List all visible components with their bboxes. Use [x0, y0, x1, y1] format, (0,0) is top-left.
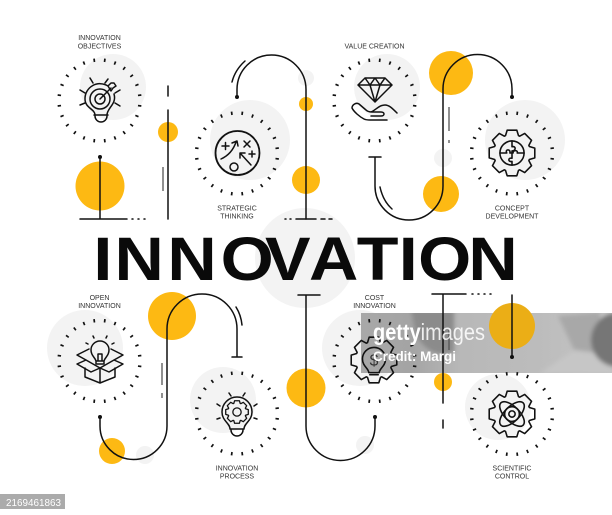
icon: gear with dollar bulb: $ — [370, 352, 379, 369]
title: INNOVATION — [93, 224, 518, 293]
connector: cost innovation curve — [298, 295, 377, 460]
item: cost innovation — [334, 295, 415, 402]
icon: diamond in hand — [352, 78, 397, 120]
connector: objectives stem — [80, 86, 168, 219]
label: THINKING — [220, 214, 254, 221]
item: open innovation — [59, 295, 140, 402]
label: INNOVATION — [78, 35, 121, 42]
connector: open innovation curve — [98, 294, 242, 459]
connector: strategic thinking curve — [232, 55, 332, 219]
yellow circles — [76, 51, 535, 464]
icon: puzzle gear — [489, 130, 535, 176]
item: value creation — [334, 44, 415, 141]
icon: bulb with gear — [217, 393, 257, 436]
label: CONTROL — [495, 474, 529, 481]
connector: scientific control lines — [432, 294, 514, 428]
icon: box with bulb — [77, 336, 123, 383]
label: INNOVATION — [353, 303, 396, 310]
label: OPEN — [90, 295, 109, 302]
icon: target bulb — [80, 78, 120, 122]
label: COST — [365, 295, 385, 302]
connector: value creation curve — [369, 55, 514, 220]
item: innovation process — [196, 373, 278, 481]
label: STRATEGIC — [217, 205, 257, 212]
item: scientific control — [472, 374, 552, 481]
label: DEVELOPMENT — [486, 214, 539, 221]
watermark text — [373, 319, 485, 364]
item: strategic thinking — [196, 113, 278, 221]
label: PROCESS — [220, 474, 254, 481]
label: INNOVATION — [78, 303, 121, 310]
background blobs — [47, 54, 565, 464]
label: CONCEPT — [495, 205, 530, 212]
watermark band — [361, 310, 612, 373]
item: innovation objectives — [59, 35, 140, 141]
label: INNOVATION — [216, 465, 258, 472]
icon: strategy board — [216, 131, 260, 175]
label: SCIENTIFIC — [493, 465, 531, 472]
label: OBJECTIVES — [78, 44, 122, 51]
image id tag: 2169461863 — [6, 497, 61, 509]
icon: atom gear — [489, 391, 535, 437]
watermark text: Credit: Margi — [373, 349, 456, 364]
label: VALUE CREATION — [344, 44, 405, 51]
watermark text: gettyimages — [373, 319, 485, 345]
item: concept development — [472, 113, 552, 221]
